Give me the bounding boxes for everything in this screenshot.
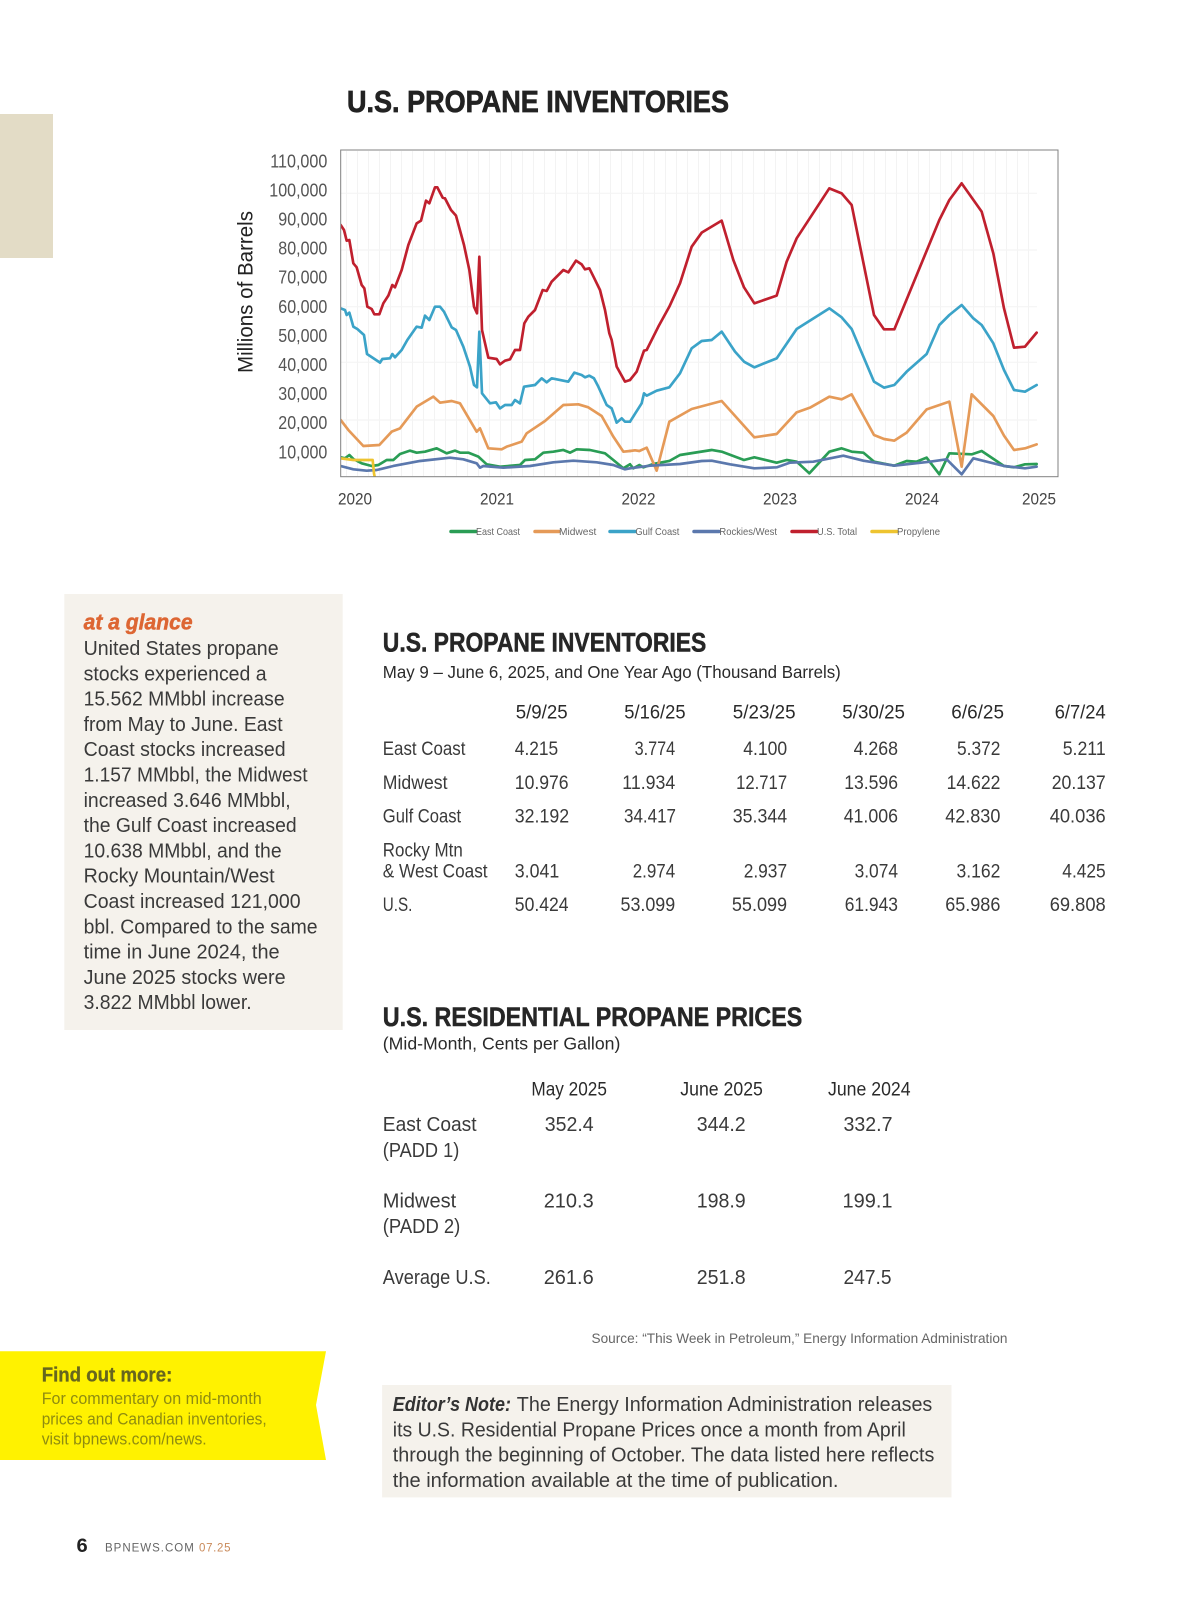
editor's note text <box>393 1394 934 1492</box>
series: Rockies/West <box>341 456 1037 474</box>
callout body: visit bpnews.com/news. <box>42 1430 207 1448</box>
column headers: 5/30/25 <box>842 703 905 724</box>
row: Gulf Coast: Gulf Coast <box>383 807 462 828</box>
prices heading: U.S. RESIDENTIAL PROPANE PRICES <box>383 1002 802 1032</box>
row: Midwest: 12.717 <box>736 773 787 794</box>
column headers: 5/16/25 <box>624 703 686 724</box>
row: East Coast: 5.372 <box>957 739 1000 760</box>
row: U.S.: 61.943 <box>845 895 898 916</box>
row: East Coast: East Coast <box>383 739 466 760</box>
footer: 6 <box>76 1536 88 1557</box>
table: U.S. residential propane prices <box>383 1002 911 1289</box>
row: Rocky Mtn and West Coast: 4.425 <box>1062 862 1106 883</box>
at a glance body text: United States propane <box>84 638 279 660</box>
series: Midwest <box>341 394 1037 471</box>
footer <box>76 1536 230 1557</box>
legend: Gulf Coast <box>635 526 679 538</box>
callout body <box>42 1390 267 1448</box>
prices column headers: June 2024 <box>828 1080 911 1100</box>
legend: Propylene <box>897 526 940 538</box>
at a glance body text: Rocky Mountain/West <box>84 866 275 888</box>
row: U.S.: 69.808 <box>1050 895 1106 916</box>
callout body: For commentary on mid-month <box>42 1390 262 1408</box>
row: Rocky Mtn and West Coast: Rocky Mtn <box>383 841 463 862</box>
row: Gulf Coast: 42.830 <box>945 807 1000 828</box>
prices row: Average U.S.: 247.5 <box>844 1267 892 1289</box>
source note: Source: “This Week in Petroleum,” Energy Information Administration <box>592 1330 1008 1346</box>
legend: U.S. Total <box>817 526 857 538</box>
at a glance body text: the Gulf Coast increased <box>84 815 297 837</box>
x axis labels: 2021 <box>480 490 514 508</box>
prices row: East Coast <box>383 1114 892 1162</box>
series: Propylene <box>341 458 375 478</box>
at a glance body text: from May to June. East <box>84 714 283 736</box>
prices row: Midwest: (PADD 2) <box>383 1216 460 1238</box>
row: Midwest: 11.934 <box>622 773 676 794</box>
prices row: Midwest: Midwest <box>383 1191 457 1213</box>
y axis labels: 80,000 <box>278 239 327 259</box>
y axis labels: 40,000 <box>278 355 327 375</box>
line chart: U.S. propane inventories <box>235 150 1058 538</box>
tan side tab <box>0 114 53 258</box>
row: U.S.: 50.424 <box>515 895 569 916</box>
row: Midwest: 13.596 <box>844 773 898 794</box>
editor's note text: the information available at the time of publication. <box>393 1470 838 1492</box>
at a glance body text: increased 3.646 MMbbl, <box>84 790 291 812</box>
y axis labels: 60,000 <box>278 297 327 317</box>
at a glance body text: 10.638 MMbbl, and the <box>84 840 282 862</box>
table subheading: May 9 – June 6, 2025, and One Year Ago (Thousand Barrels) <box>383 662 841 682</box>
row: East Coast: 5.211 <box>1063 739 1106 760</box>
row: Rocky Mtn and West Coast: 3.074 <box>855 862 898 883</box>
y axis labels: 20,000 <box>278 413 327 433</box>
at a glance body text <box>84 638 318 1014</box>
at a glance body text: 1.157 MMbbl, the Midwest <box>84 764 308 786</box>
legend: East Coast <box>476 526 520 538</box>
prices row: Average U.S.: Average U.S. <box>383 1267 491 1289</box>
column headers: 5/9/25 <box>516 703 568 724</box>
y axis labels: 10,000 <box>278 442 327 462</box>
prices row: Midwest: 199.1 <box>842 1191 892 1213</box>
editor's note text: The Energy Information Administration releases <box>517 1394 932 1416</box>
prices row: Midwest <box>383 1191 892 1238</box>
at a glance heading: at a glance <box>84 610 193 634</box>
row: East Coast: 3.774 <box>635 739 676 760</box>
row: Gulf Coast <box>383 807 1106 828</box>
row: East Coast <box>383 739 1106 760</box>
row: Gulf Coast: 35.344 <box>733 807 787 828</box>
row: East Coast: 4.268 <box>854 739 898 760</box>
series: U.S. Total <box>341 183 1037 382</box>
row: U.S.: 65.986 <box>945 895 1000 916</box>
prices column headers <box>531 1080 911 1100</box>
prices row: East Coast: 344.2 <box>697 1114 746 1136</box>
row: Midwest: Midwest <box>383 773 448 794</box>
at a glance body text: stocks experienced a <box>84 663 267 685</box>
panel: at a glance <box>64 594 343 1030</box>
row: U.S. <box>383 895 1106 916</box>
callout heading: Find out more: <box>42 1365 172 1387</box>
at a glance body text: bbl. Compared to the same <box>84 916 318 938</box>
prices row: East Coast: 352.4 <box>545 1114 594 1136</box>
row: U.S.: 53.099 <box>620 895 675 916</box>
at a glance body text: time in June 2024, the <box>84 942 280 964</box>
series: Gulf Coast <box>341 305 1037 423</box>
prices row: East Coast: 332.7 <box>844 1114 892 1136</box>
legend: Rockies/West <box>719 526 777 538</box>
legend: Midwest <box>559 526 596 538</box>
editor's note text: through the beginning of October. The data listed here reflects <box>393 1445 934 1467</box>
at a glance body text: Coast stocks increased <box>84 739 286 761</box>
y axis labels <box>269 151 327 462</box>
row: Rocky Mtn and West Coast: 3.162 <box>956 862 1000 883</box>
row: Rocky Mtn and West Coast: & West Coast <box>383 862 488 883</box>
prices subheading: (Mid-Month, Cents per Gallon) <box>383 1034 620 1054</box>
at a glance body text: 3.822 MMbbl lower. <box>84 992 252 1014</box>
row: Midwest: 10.976 <box>515 773 569 794</box>
prices row: East Coast: East Coast <box>383 1114 477 1136</box>
at a glance body text: June 2025 stocks were <box>84 967 286 989</box>
row: Gulf Coast: 41.006 <box>844 807 898 828</box>
prices row: East Coast: (PADD 1) <box>383 1140 459 1162</box>
callout: find out more <box>0 1351 326 1460</box>
editor's note text: its U.S. Residential Propane Prices once a month from April <box>393 1419 906 1441</box>
column headers: 6/6/25 <box>951 703 1004 724</box>
callout body: prices and Canadian inventories, <box>42 1410 267 1428</box>
y axis labels: 70,000 <box>278 268 327 288</box>
column headers: 5/23/25 <box>733 703 796 724</box>
x axis labels: 2025 <box>1022 490 1056 508</box>
prices row: Average U.S.: 251.8 <box>697 1267 746 1289</box>
editor's note text: Editor’s Note: <box>393 1394 511 1416</box>
row: Gulf Coast: 40.036 <box>1050 807 1106 828</box>
prices row: Average U.S.: 261.6 <box>544 1267 594 1289</box>
x axis labels: 2023 <box>763 490 797 508</box>
row: Rocky Mtn and West Coast <box>383 841 1106 883</box>
x axis labels: 2022 <box>622 490 656 508</box>
footer: 07.25 <box>199 1542 230 1554</box>
y axis labels: 30,000 <box>278 384 327 404</box>
row: Rocky Mtn and West Coast: 2.974 <box>633 862 676 883</box>
legend <box>451 526 940 538</box>
title: U.S. PROPANE INVENTORIES <box>347 84 729 119</box>
prices row: Average U.S. <box>383 1267 892 1289</box>
panel: editor's note <box>382 1385 952 1497</box>
row: U.S.: 55.099 <box>732 895 787 916</box>
row: Rocky Mtn and West Coast: 2.937 <box>744 862 787 883</box>
prices column headers: June 2025 <box>680 1080 763 1100</box>
row: East Coast: 4.215 <box>515 739 558 760</box>
x axis labels <box>338 490 1056 508</box>
column headers <box>516 703 1106 724</box>
y axis title: Millions of Barrels <box>235 211 258 373</box>
row: U.S.: U.S. <box>383 895 412 916</box>
row: Rocky Mtn and West Coast: 3.041 <box>515 862 559 883</box>
row: Midwest: 14.622 <box>947 773 1000 794</box>
table heading: U.S. PROPANE INVENTORIES <box>383 628 706 658</box>
y axis labels: 100,000 <box>269 180 327 200</box>
x axis labels: 2024 <box>905 490 939 508</box>
at a glance body text: Coast increased 121,000 <box>84 891 301 913</box>
row: Gulf Coast: 34.417 <box>624 807 676 828</box>
table: U.S. propane inventories <box>383 628 1106 916</box>
y axis labels: 90,000 <box>278 210 327 230</box>
column headers: 6/7/24 <box>1055 703 1106 724</box>
prices row: Midwest: 198.9 <box>697 1191 746 1213</box>
row: Gulf Coast: 32.192 <box>515 807 569 828</box>
row: Midwest: 20.137 <box>1052 773 1106 794</box>
series: East Coast <box>341 448 1037 474</box>
row: East Coast: 4.100 <box>743 739 787 760</box>
y axis labels: 50,000 <box>278 326 327 346</box>
x axis labels: 2020 <box>338 490 372 508</box>
y axis labels: 110,000 <box>270 151 327 171</box>
prices column headers: May 2025 <box>531 1080 607 1100</box>
row: Midwest <box>383 773 1106 794</box>
at a glance body text: 15.562 MMbbl increase <box>84 689 285 711</box>
prices row: Midwest: 210.3 <box>544 1191 594 1213</box>
plot area <box>341 150 1058 478</box>
footer: BPNEWS.COM <box>105 1542 194 1554</box>
